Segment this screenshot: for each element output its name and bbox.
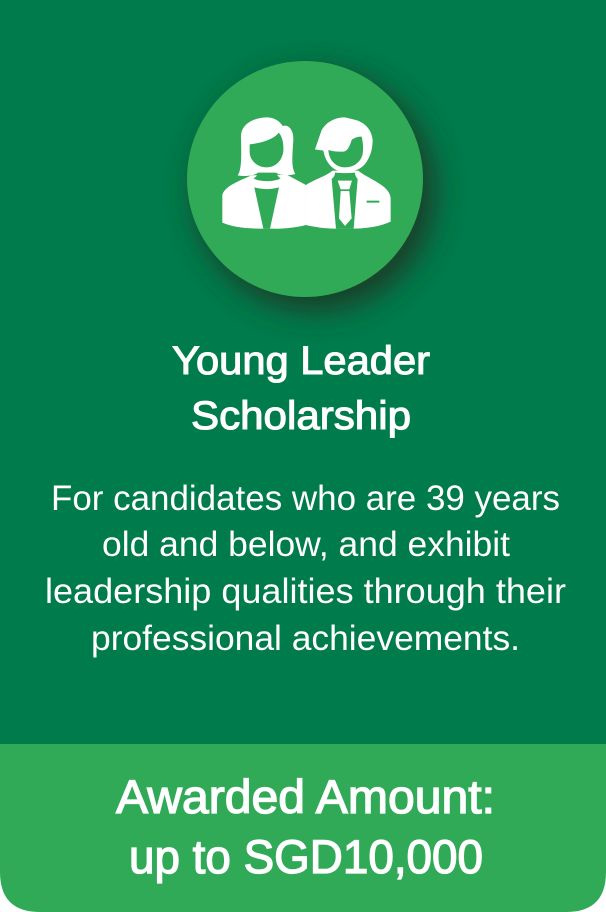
panel: awarded amount band [0,744,606,912]
man body [306,171,391,229]
description text: For candidates who are 39 years [51,479,560,518]
man pocket [367,201,379,203]
man face [328,137,363,167]
awarded amount text: Awarded Amount: [116,770,495,823]
icon: circle badge with two people [187,61,435,311]
man shirt [332,173,358,229]
description text: leadership qualities through their [45,572,566,611]
awarded amount text: up to SGD10,000 [129,830,483,883]
woman body [222,175,306,229]
description text: old and below, and exhibit [102,525,510,564]
woman neck [253,173,281,181]
description text: professional achievements. [91,619,520,658]
icon: woman and man [222,117,391,229]
man tie [338,181,352,226]
woman face [250,133,283,167]
heading [172,339,430,438]
heading: Scholarship [191,394,411,438]
awarded amount text [116,770,495,883]
heading: Young Leader [172,339,430,383]
description text [45,479,566,658]
man hair and head [315,117,373,172]
woman top [254,187,279,229]
woman hair [238,117,295,176]
